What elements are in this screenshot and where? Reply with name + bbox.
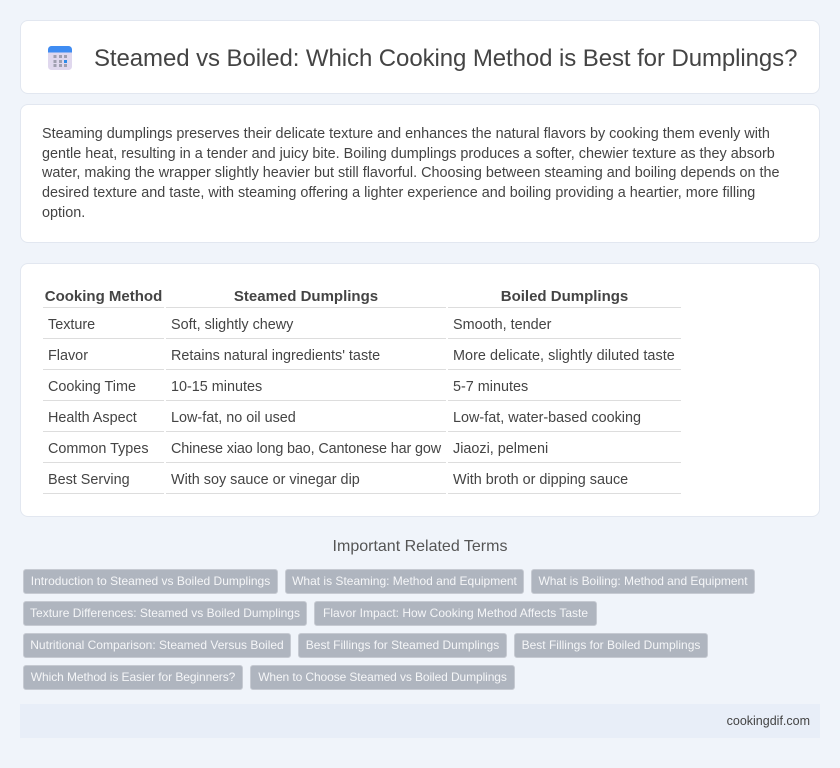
related terms heading: Important Related Terms xyxy=(333,538,507,555)
tag: What is Steaming: Method and Equipment xyxy=(292,574,517,588)
tag xyxy=(298,633,507,658)
row: health aspect: Health Aspect xyxy=(48,410,137,426)
row: common types: Chinese xiao long bao, Cantonese har gow xyxy=(171,441,441,457)
intro paragraph: Steaming dumplings preserves their delicate texture and enhances the natural flavors by cooking them evenly with xyxy=(42,126,770,142)
row: texture: Smooth, tender xyxy=(453,317,551,333)
tag: Best Fillings for Steamed Dumplings xyxy=(306,638,499,652)
row: health aspect xyxy=(43,410,681,432)
tag xyxy=(23,665,243,690)
title: Steamed vs Boiled: Which Cooking Method is Best for Dumplings? xyxy=(94,45,797,72)
tag xyxy=(23,633,291,658)
footer bar xyxy=(20,704,820,738)
row: cooking time: 10-15 minutes xyxy=(171,379,262,395)
row: texture xyxy=(43,317,681,339)
row: texture: Soft, slightly chewy xyxy=(171,317,293,333)
header card xyxy=(20,20,820,94)
comparison table xyxy=(43,288,681,494)
row: flavor: Retains natural ingredients' taste xyxy=(171,348,380,364)
footer source: cookingdif.com xyxy=(727,714,810,728)
table header: Cooking Method xyxy=(45,288,162,305)
tag: What is Boiling: Method and Equipment xyxy=(538,574,748,588)
table header xyxy=(43,288,681,308)
intro paragraph: water, making the wrapper slightly heavier but still flavorful. Choosing between steaming and boiling depends on the xyxy=(42,165,780,181)
tag: Best Fillings for Boiled Dumplings xyxy=(522,638,700,652)
row: flavor xyxy=(43,348,681,370)
tag xyxy=(314,601,597,626)
comparison table panel xyxy=(20,263,820,517)
row: common types: Common Types xyxy=(48,441,149,457)
table header: Steamed Dumplings xyxy=(234,288,378,305)
row: health aspect: Low-fat, water-based cooking xyxy=(453,410,641,426)
tag xyxy=(250,665,515,690)
intro paragraph xyxy=(42,126,780,221)
table header: Boiled Dumplings xyxy=(501,288,628,305)
tag xyxy=(23,601,307,626)
tag: Which Method is Easier for Beginners? xyxy=(31,670,235,684)
icon: calendar xyxy=(48,46,72,70)
row: health aspect: Low-fat, no oil used xyxy=(171,410,296,426)
related terms tags xyxy=(23,569,755,690)
tag: Flavor Impact: How Cooking Method Affects Taste xyxy=(323,606,588,620)
row: texture: Texture xyxy=(48,317,95,333)
tag xyxy=(23,569,278,594)
row: best serving: Best Serving xyxy=(48,472,130,488)
row: cooking time: Cooking Time xyxy=(48,379,136,395)
intro paragraph: gentle heat, resulting in a tender and juicy bite. Boiling dumplings produces a softer, chewier texture as they absorb xyxy=(42,146,775,162)
tag: When to Choose Steamed vs Boiled Dumplings xyxy=(258,670,507,684)
tag xyxy=(531,569,755,594)
row: common types xyxy=(43,441,681,463)
tag xyxy=(285,569,524,594)
row: best serving: With soy sauce or vinegar dip xyxy=(171,472,360,488)
tag: Nutritional Comparison: Steamed Versus Boiled xyxy=(30,638,284,652)
intro paragraph: desired texture and taste, with steaming offering a lighter experience and boiling providing a heartier, more filling xyxy=(42,185,755,201)
intro paragraph: option. xyxy=(42,205,85,221)
row: best serving: With broth or dipping sauce xyxy=(453,472,628,488)
row: cooking time: 5-7 minutes xyxy=(453,379,528,395)
row: common types: Jiaozi, pelmeni xyxy=(453,441,548,457)
row: best serving xyxy=(43,472,681,494)
row: cooking time xyxy=(43,379,681,401)
row: flavor: Flavor xyxy=(48,348,88,364)
row: flavor: More delicate, slightly diluted taste xyxy=(453,348,675,364)
intro text panel xyxy=(20,104,820,243)
tag: Introduction to Steamed vs Boiled Dumplings xyxy=(31,574,270,588)
tag: Texture Differences: Steamed vs Boiled Dumplings xyxy=(30,606,300,620)
tag xyxy=(514,633,708,658)
